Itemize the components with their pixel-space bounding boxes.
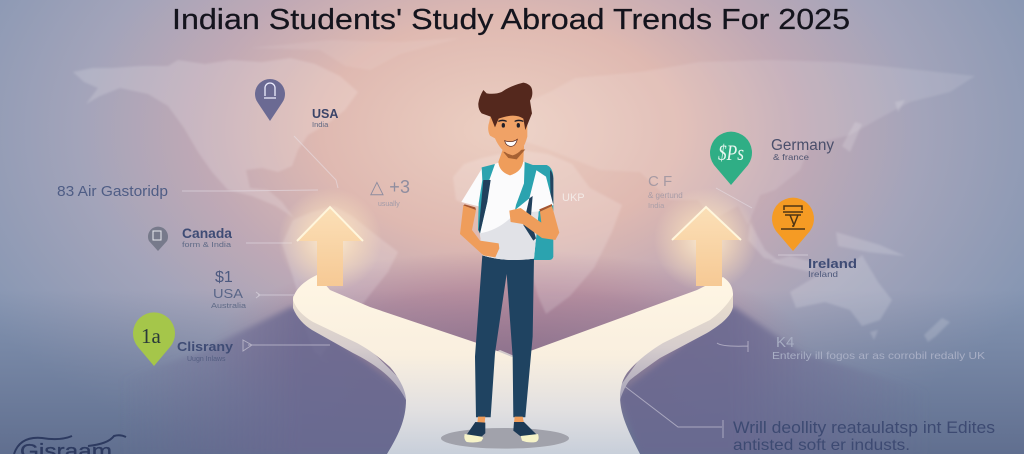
world map [73,38,975,364]
pin: green [133,312,175,366]
left arrow glow [278,188,382,292]
pin: orange [772,198,814,251]
eyes and brows [498,120,523,128]
logo [14,435,126,454]
label: UK note: K4 [776,334,794,351]
label: delta 3: usually [378,201,400,208]
label: Canada: form & India [182,240,232,249]
connector lines [182,136,808,438]
backpack [532,165,553,260]
pin: Canada [148,227,168,251]
label: gertund: India [648,201,665,210]
label: UKP: UKP [562,192,585,204]
forked road [293,275,733,454]
pin: green: 1a [141,324,162,348]
student figure [441,83,569,449]
label: Clisrany: Uugn Inlaws [187,356,226,363]
label: air scholarship: 83 Air Gastoridp [57,183,168,200]
label: USA Australia: USA [213,286,243,301]
label: USA Australia [211,269,247,310]
right up arrow [672,207,741,286]
label: delta 3: △ +3 [370,177,410,197]
backpack straps [478,164,495,233]
text block: bottom right: antisted soft er industs. [733,437,910,454]
right arrow glow [654,188,758,292]
hair [478,83,532,130]
dark lower regions [0,306,1024,454]
neck [498,146,524,175]
label: Clisrany: Clisrany [177,339,234,354]
label: Germany [771,137,834,162]
label: Ireland [808,256,857,279]
label: USA: India [312,120,329,129]
shirt shade [480,211,539,260]
label: USA [312,107,338,129]
arms [460,205,499,257]
label: gertund: & gertund [648,191,683,200]
label: UK note [772,334,985,362]
road side edge [293,293,733,400]
label: Clisrany [177,339,234,363]
left shoe [464,417,485,442]
label: delta 3 [370,177,410,208]
label: Ireland: Ireland [808,270,838,279]
label: USA Australia: Australia [211,301,247,310]
label: Ireland: Ireland [808,256,857,271]
smile [505,139,517,146]
label: UK note: Enterily ill fogos ar as corrobil redally UK [772,350,985,362]
label: gertund: C F [648,173,672,190]
label: Germany: Germany [771,137,834,154]
pin: teal: $Ps [718,140,744,165]
label: gertund [648,173,683,210]
trousers [475,255,534,417]
title: Indian Students' Study Abroad Trends For 2025 [172,4,850,36]
ground shadow [441,428,569,449]
right shoe [513,417,539,442]
left up arrow [297,207,363,286]
label: Canada: Canada [182,226,232,241]
label: USA Australia: $1 [215,269,233,286]
face [488,115,527,155]
text block: bottom right [733,419,995,454]
label: USA: USA [312,107,338,121]
pin: USA [255,79,285,121]
label: Germany: & france [773,152,809,162]
pin: teal [710,132,752,185]
text block: bottom right: Wrill deollity reataulatsp int Edites [733,419,995,437]
shirt [461,162,553,260]
label: Canada [182,226,232,249]
road top surface [293,275,733,454]
